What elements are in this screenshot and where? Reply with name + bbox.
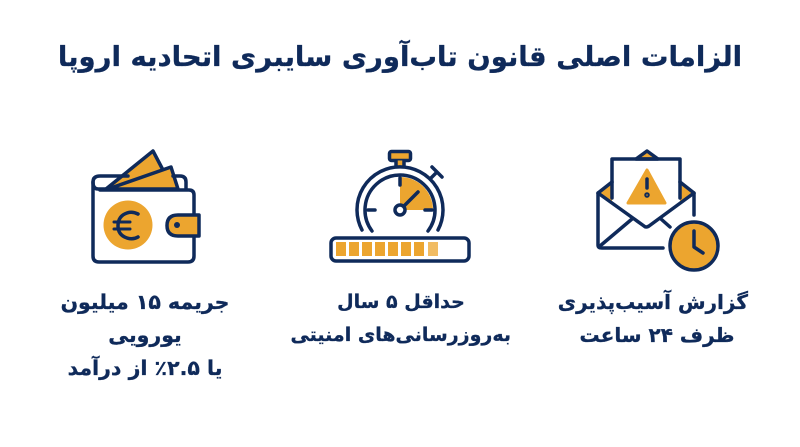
caption: report: [558, 290, 748, 348]
caption: fine: یا ۲.۵٪ از درآمد: [68, 356, 222, 380]
caption: fine: [61, 290, 229, 380]
caption: updates: [290, 291, 511, 346]
caption: updates: به‌روزرسانی‌های امنیتی: [290, 324, 511, 346]
caption: fine: یورویی: [108, 323, 182, 347]
caption: report: گزارش آسیب‌پذیری: [558, 290, 748, 314]
caption: report: ظرف ۲۴ ساعت: [580, 323, 734, 347]
caption: updates: حداقل ۵ سال: [337, 291, 465, 313]
caption: fine: جریمه ۱۵ میلیون: [61, 290, 229, 314]
title: الزامات اصلی قانون تاب‌آوری سایبری اتحادیه اروپا: [58, 41, 742, 73]
